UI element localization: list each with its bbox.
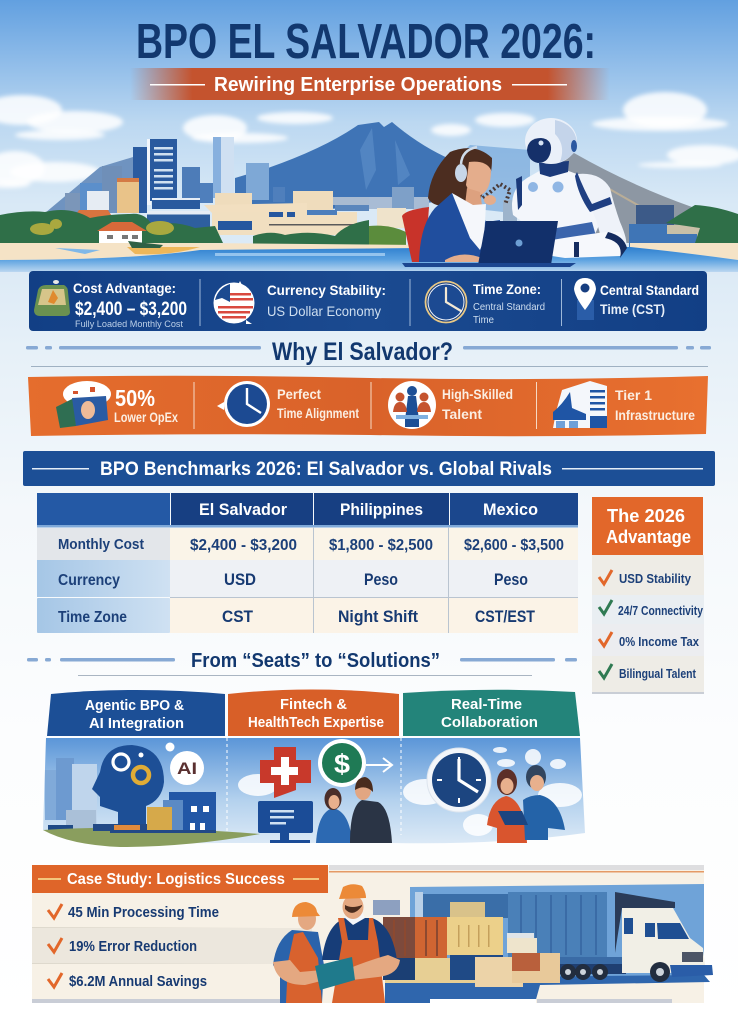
heading: from seats to solutions [27, 650, 577, 676]
central standard time text: Time (CST) [600, 302, 665, 317]
tier 1 infrastructure text: Tier 1 [615, 387, 652, 403]
illustration: ai head: AI [177, 760, 197, 778]
case study heading: Case Study: Logistics Success [67, 871, 285, 888]
hero illustration: city, volcano, agent and robot [0, 92, 738, 272]
benefit: income tax [599, 632, 700, 649]
buildings right of the robot [629, 205, 717, 247]
icon: lower opex [56, 381, 111, 428]
table header: Philippines [340, 500, 423, 519]
row: monthly cost: $1,800 - $2,500 [329, 537, 433, 554]
result: annual savings: $6.2M Annual Savings [69, 974, 207, 990]
heading: from seats to solutions: From “Seats” to “Solutions” [191, 650, 440, 672]
benefit: usd stability [599, 570, 692, 586]
subtitle banner [130, 68, 610, 100]
card header: agentic bpo: AI Integration [89, 716, 184, 732]
laptop [402, 221, 576, 267]
card header: fintech: HealthTech Expertise [248, 715, 384, 731]
currency stability text: Currency Stability: [267, 282, 386, 298]
panel header [592, 497, 703, 555]
row: currency: Currency [58, 572, 120, 589]
card header: agentic bpo [47, 690, 225, 736]
card header: fintech [228, 690, 399, 736]
clouds [0, 92, 738, 188]
result: processing time: 45 Min Processing Time [68, 905, 219, 921]
card header: real-time [403, 690, 580, 736]
panel: solutions [43, 690, 585, 847]
far mountain [45, 157, 133, 213]
illustration: truck and cargo [373, 884, 713, 1003]
row: monthly cost: Monthly Cost [58, 537, 144, 553]
row: monthly cost [37, 528, 578, 560]
row: currency [37, 560, 578, 597]
lower opex text: Lower OpEx [114, 410, 178, 425]
house [97, 222, 163, 248]
illustration: health and finance [258, 739, 392, 843]
row: time zone: CST [222, 607, 254, 626]
time alignment text: Time Alignment [277, 406, 359, 421]
row: time zone: CST/EST [475, 607, 536, 626]
row: time zone: Time Zone [58, 609, 127, 626]
card header: real-time: Collaboration [441, 715, 538, 731]
panel header: The 2026 [607, 505, 685, 526]
panel: key facts bar [29, 271, 707, 331]
row: currency: Peso [494, 570, 528, 589]
row: time zone [37, 598, 578, 633]
currency stability text [267, 282, 386, 319]
beach [0, 243, 738, 260]
gray mountain behind robot [540, 153, 700, 243]
currency stability text: US Dollar Economy [267, 303, 381, 319]
subtitle banner: Rewiring Enterprise Operations [214, 74, 502, 96]
card header: real-time: Real-Time [451, 697, 522, 713]
time zone text: Time [473, 314, 494, 326]
skyline [65, 137, 285, 230]
tree line [0, 205, 738, 245]
time alignment text [277, 386, 359, 421]
central standard time text: Central Standard [600, 283, 699, 298]
table header: Mexico [483, 500, 538, 519]
heading: why el salvador [26, 338, 711, 367]
lower opex text [114, 385, 178, 425]
title: BPO EL SALVADOR 2026: [136, 15, 596, 69]
row: currency: USD [224, 570, 256, 589]
icon: clock [217, 381, 270, 427]
civic complex [204, 191, 369, 235]
heading bar: benchmarks: BPO Benchmarks 2026: El Salvador vs. Global Rivals [100, 458, 552, 480]
icon: location pin [574, 278, 596, 320]
panel: why el salvador benefits [28, 376, 708, 436]
time zone text [473, 281, 545, 326]
buildings behind agent [369, 145, 530, 228]
icon: US flag circle [214, 281, 254, 324]
central standard time text [600, 283, 699, 317]
time zone text: Time Zone: [473, 281, 541, 297]
cost advantage text: Cost Advantage: [73, 280, 176, 296]
cost advantage text [73, 280, 187, 330]
illustration: two workers [273, 884, 400, 1003]
benefit: bilingual talent [599, 664, 697, 681]
case study heading [32, 865, 328, 893]
lower opex text: 50% [115, 385, 155, 411]
tier 1 infrastructure text [615, 387, 695, 423]
cost advantage text: $2,400 – $3,200 [75, 299, 187, 320]
tier 1 infrastructure text: Infrastructure [615, 407, 695, 423]
volcano [235, 122, 470, 215]
panel header: Advantage [606, 526, 691, 547]
heading bar: benchmarks [23, 451, 715, 486]
illustration: clock and colleagues [427, 748, 565, 843]
time alignment text: Perfect [277, 386, 321, 402]
row: monthly cost: $2,600 - $3,500 [464, 537, 564, 554]
benefit: bilingual talent: Bilingual Talent [619, 666, 697, 681]
robot [512, 118, 627, 258]
benefit: income tax: 0% Income Tax [619, 634, 700, 649]
cost advantage text: Fully Loaded Monthly Cost [75, 319, 183, 330]
icon: talent [388, 381, 436, 429]
table header: El Salvador [199, 500, 287, 519]
result: error reduction: 19% Error Reduction [69, 939, 197, 955]
card header: agentic bpo: Agentic BPO & [85, 698, 185, 714]
heading: why el salvador: Why El Salvador? [272, 338, 453, 366]
high-skilled talent text: Talent [442, 406, 482, 422]
panel: case study [32, 865, 713, 1003]
row: time zone: Night Shift [338, 607, 418, 626]
high-skilled talent text [442, 386, 513, 422]
comparison table [37, 493, 578, 633]
benefit: usd stability: USD Stability [619, 571, 692, 586]
table header [37, 493, 578, 528]
icon: cost advantage wallet [34, 280, 70, 316]
illustration: health and finance: $ [334, 749, 350, 779]
time zone text: Central Standard [473, 301, 545, 313]
benefit: connectivity [599, 600, 704, 618]
icon: building [553, 381, 607, 428]
benefit: connectivity: 24/7 Connectivity [618, 603, 704, 618]
card header: fintech: Fintech & [280, 697, 348, 713]
water [0, 247, 738, 272]
high-skilled talent text: High-Skilled [442, 386, 513, 402]
icon: clock [426, 282, 466, 322]
row: monthly cost: $2,400 - $3,200 [190, 537, 297, 554]
panel: the 2026 advantage [592, 497, 704, 694]
agent at laptop [402, 147, 510, 262]
illustration: ai head [43, 742, 260, 847]
row: currency: Peso [364, 570, 398, 589]
